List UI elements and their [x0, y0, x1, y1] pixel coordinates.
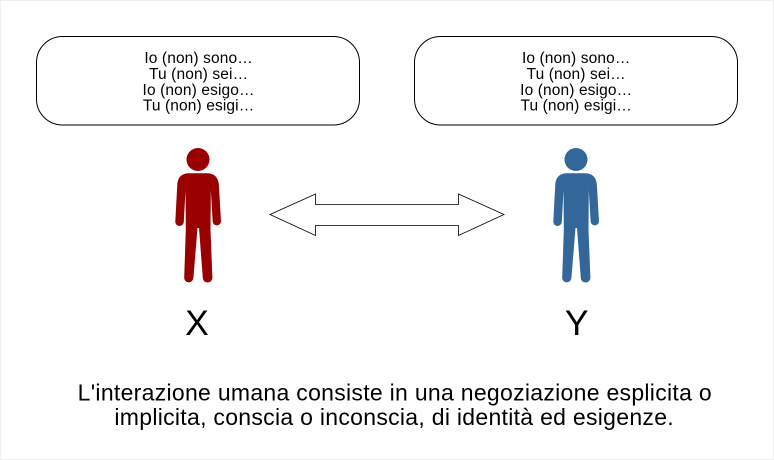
speech box: X: Io (non) esigo…	[143, 82, 255, 99]
caption: implicita, conscia o inconscia, di identità ed esigenze.	[114, 404, 674, 430]
speech box: X: Tu (non) sei…	[149, 66, 248, 83]
speech box: Y: Tu (non) esigi…	[520, 98, 632, 114]
speech box: Y: Tu (non) sei…	[527, 66, 626, 83]
speech box: X: Tu (non) esigi…	[143, 98, 254, 114]
speech box: Y: Io (non) sono…	[522, 50, 630, 67]
speech box: X	[36, 36, 360, 125]
arrow: double-headed	[270, 194, 504, 236]
icon: person X (red)	[175, 148, 221, 283]
label: X: X	[185, 303, 209, 343]
label: Y: Y	[565, 303, 589, 343]
speech box: X: Io (non) sono…	[144, 50, 253, 67]
icon: person Y (blue)	[553, 148, 599, 283]
caption: L'interazione umana consiste in una negoziazione esplicita o	[78, 380, 712, 406]
speech box: Y: Io (non) esigo…	[520, 82, 632, 99]
speech box: Y	[414, 36, 738, 125]
